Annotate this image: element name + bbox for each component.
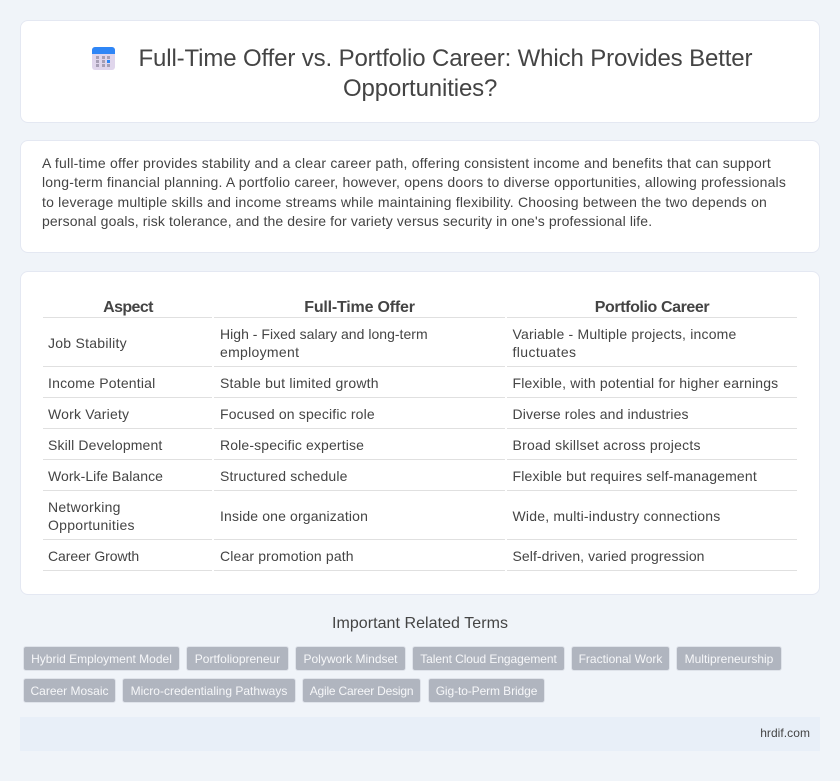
balance portfolio: Flexible but requires self-management [512,468,757,484]
tag [676,646,782,671]
row: networking opportunities [48,499,135,533]
income portfolio: Flexible, with potential for higher earnings [512,375,778,391]
header card [20,20,820,123]
tag: Career Mosaic [30,684,109,698]
row: networking opportunities: Opportunities [48,517,135,533]
tag [186,646,289,671]
tag [122,678,296,703]
intro text: long-term financial planning. A portfolio career, however, opens doors to diverse opportunities, allowing professionals [42,174,786,190]
job stability full-time: High - Fixed salary and long-term [220,326,428,342]
title: Opportunities? [343,75,497,102]
tag [412,646,565,671]
intro text [42,154,786,229]
row: job stability: Job Stability [48,335,127,351]
comparison table [43,299,797,571]
tag: Gig-to-Perm Bridge [436,684,537,698]
tag [23,646,180,671]
tag: Multipreneurship [685,652,773,666]
tag [295,646,406,671]
title [138,45,752,102]
row: income potential: Income Potential [48,375,155,391]
tag: Portfoliopreneur [195,652,280,666]
job stability portfolio [512,326,737,360]
table card [20,271,820,595]
tag: Agile Career Design [310,684,413,698]
networking full-time: Inside one organization [220,508,368,524]
tag [428,678,545,703]
income full-time: Stable but limited growth [220,375,379,391]
job stability full-time [220,326,428,360]
tag: Fractional Work [579,652,662,666]
job stability portfolio: Variable - Multiple projects, income [512,326,737,342]
row: skill development: Skill Development [48,437,162,453]
footer source: hrdif.com [760,726,810,740]
growth full-time: Clear promotion path [220,548,354,564]
row: work variety: Work Variety [48,406,129,422]
skill full-time: Role-specific expertise [220,437,364,453]
intro text: to leverage multiple skills and income streams while maintaining flexibility. Choosing between the two depends on [42,194,767,210]
title: Full-Time Offer vs. Portfolio Career: Which Provides Better [138,45,752,72]
intro card [20,140,820,253]
related terms heading: Important Related Terms [332,615,508,632]
icon: calendar [92,47,115,70]
intro text: A full-time offer provides stability and a clear career path, offering consistent income and benefits that can support [42,154,771,170]
job stability portfolio: fluctuates [512,344,576,360]
tag [302,678,421,703]
job stability full-time: employment [220,344,299,360]
row: career growth: Career Growth [48,548,139,564]
footer [20,717,820,751]
variety portfolio: Diverse roles and industries [512,406,689,422]
table header: portfolio career: Portfolio Career [595,299,709,316]
variety full-time: Focused on specific role [220,406,375,422]
row: work-life balance: Work-Life Balance [48,468,163,484]
row: networking opportunities: Networking [48,499,121,515]
skill portfolio: Broad skillset across projects [512,437,701,453]
intro text: personal goals, risk tolerance, and the desire for variety versus security in one's professional life. [42,213,652,229]
tag: Micro-credentialing Pathways [131,684,287,698]
networking portfolio: Wide, multi-industry connections [512,508,720,524]
tag: Hybrid Employment Model [31,652,172,666]
tag: Talent Cloud Engagement [420,652,557,666]
table header: aspect: Aspect [103,299,153,316]
balance full-time: Structured schedule [220,468,348,484]
tags [23,646,782,703]
tag: Polywork Mindset [303,652,398,666]
growth portfolio: Self-driven, varied progression [512,548,705,564]
table header: full-time offer: Full-Time Offer [304,299,415,316]
tag [571,646,670,671]
tag [23,678,116,703]
